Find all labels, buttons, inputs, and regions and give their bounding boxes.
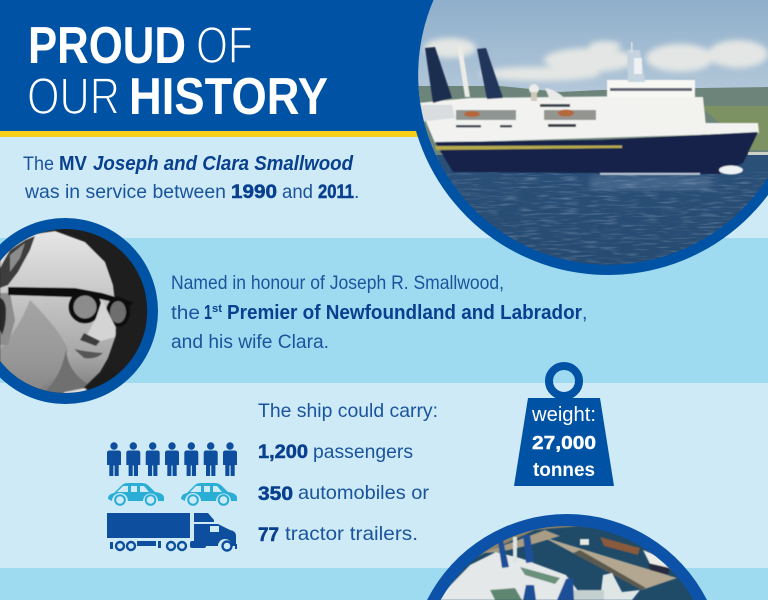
- namesake text: Named in honour of Joseph R. Smallwood,: [171, 272, 504, 294]
- capacity text: [258, 400, 438, 546]
- namesake text: and his wife Clara.: [171, 331, 329, 353]
- namesake text: ,: [582, 302, 587, 324]
- intro text: and: [282, 181, 313, 203]
- title: OUR: [27, 68, 120, 126]
- capacity text: The ship could carry:: [258, 400, 438, 422]
- icon: two cars: [108, 483, 237, 505]
- photo: ship in circular frame: [408, 0, 768, 275]
- intro text: The: [23, 153, 54, 175]
- icon: weight with tonnage: 27,000: [532, 433, 596, 453]
- icon: weight with tonnage: tonnes: [533, 460, 595, 481]
- capacity text: automobiles or: [298, 482, 430, 504]
- intro text: Joseph and Clara Smallwood: [93, 153, 354, 175]
- namesake text: 1: [204, 302, 212, 324]
- icon: weight with tonnage: weight:: [531, 404, 596, 426]
- namesake text: [171, 272, 587, 353]
- photo: portrait of Joseph Smallwood: [0, 218, 158, 404]
- band: bottom section background: [0, 568, 768, 600]
- title: PROUD: [28, 17, 186, 75]
- namesake text: Premier of Newfoundland and Labrador: [227, 302, 582, 324]
- capacity text: passengers: [313, 441, 413, 463]
- title: HISTORY: [129, 68, 328, 126]
- intro text: [23, 153, 359, 203]
- namesake text: st: [212, 303, 222, 315]
- capacity text: 1,200: [258, 442, 308, 463]
- intro text: .: [354, 181, 359, 203]
- title: OF: [196, 17, 253, 75]
- title: [27, 17, 328, 126]
- capacity text: tractor trailers.: [285, 523, 418, 545]
- capacity text: 350: [258, 484, 293, 505]
- header banner: [0, 0, 768, 137]
- intro text: 2011: [318, 182, 354, 203]
- intro text: MV: [59, 153, 88, 175]
- intro text: 1990: [231, 182, 277, 203]
- namesake text: the: [171, 302, 200, 324]
- band: namesake background: [0, 238, 768, 383]
- intro text: was in service between: [24, 181, 226, 203]
- icon: tractor trailer: [107, 513, 237, 550]
- icon: row of seven passengers: [107, 442, 237, 476]
- icon: weight with tonnage: [514, 366, 614, 486]
- photo: ships at port in circular frame: [427, 514, 707, 600]
- capacity text: 77: [258, 525, 279, 546]
